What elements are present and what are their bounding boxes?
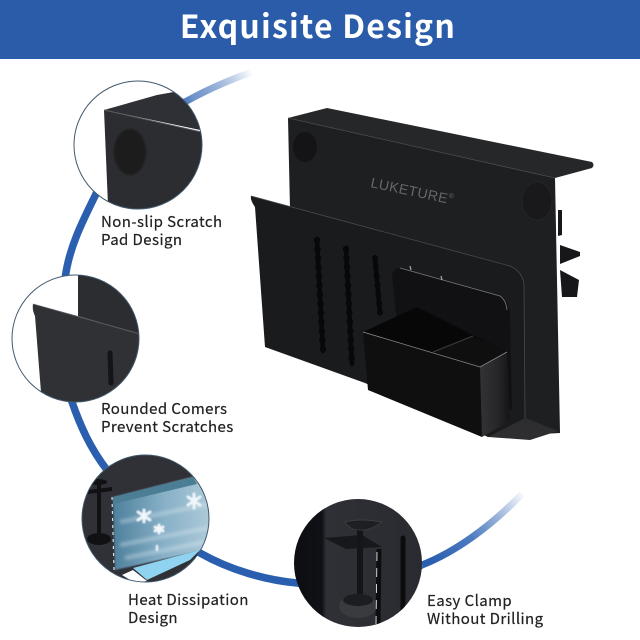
hooks <box>410 266 442 280</box>
back plate <box>288 118 560 437</box>
curved connector arc <box>63 72 522 584</box>
top pad <box>345 520 382 530</box>
box backing plate <box>392 268 512 410</box>
adjust knob <box>339 598 376 618</box>
label: rounded corners: Rounded Comers <box>101 398 228 419</box>
box: side <box>480 352 510 437</box>
detail circle: heat dissipation <box>82 455 212 583</box>
label: non-slip scratch pad: Non-slip Scratch <box>101 211 222 232</box>
front plate <box>251 196 525 437</box>
top flange <box>288 108 594 178</box>
box: interior <box>363 307 507 367</box>
label: easy clamp: Easy Clamp <box>427 590 512 611</box>
slot <box>110 353 111 383</box>
header banner <box>0 0 640 59</box>
slots <box>317 240 380 364</box>
label: heat dissipation: Heat Dissipation <box>128 589 249 610</box>
detail circle: non-slip pad <box>74 80 202 210</box>
box: right compartment <box>433 336 507 367</box>
label: rounded corners: Prevent Scratches <box>101 416 234 437</box>
pad: left <box>293 132 317 162</box>
label: non-slip scratch pad: Pad Design <box>101 229 182 250</box>
title: Exquisite Design <box>180 2 456 48</box>
clamp screw <box>357 530 363 594</box>
box: front <box>363 332 482 437</box>
detail circle: easy clamp <box>294 499 422 627</box>
label: easy clamp: Without Drilling <box>427 608 544 629</box>
scratch pad <box>114 129 146 175</box>
box: divider <box>433 336 473 352</box>
base foot <box>488 417 558 440</box>
light strip <box>133 550 200 580</box>
clamp silhouette <box>87 479 112 545</box>
right-side clamp parts <box>558 210 580 297</box>
product photo: desk organizer <box>251 108 594 440</box>
snowflakes <box>138 494 200 550</box>
clamp arm <box>324 535 382 549</box>
brand logo: LUKETURE <box>369 174 450 206</box>
cooling panel <box>113 477 212 570</box>
brand logo: ® <box>448 192 455 201</box>
slots <box>378 549 379 624</box>
label: heat dissipation: Design <box>128 607 178 628</box>
pad: right <box>522 182 552 220</box>
detail circle: rounded corners <box>12 270 145 405</box>
